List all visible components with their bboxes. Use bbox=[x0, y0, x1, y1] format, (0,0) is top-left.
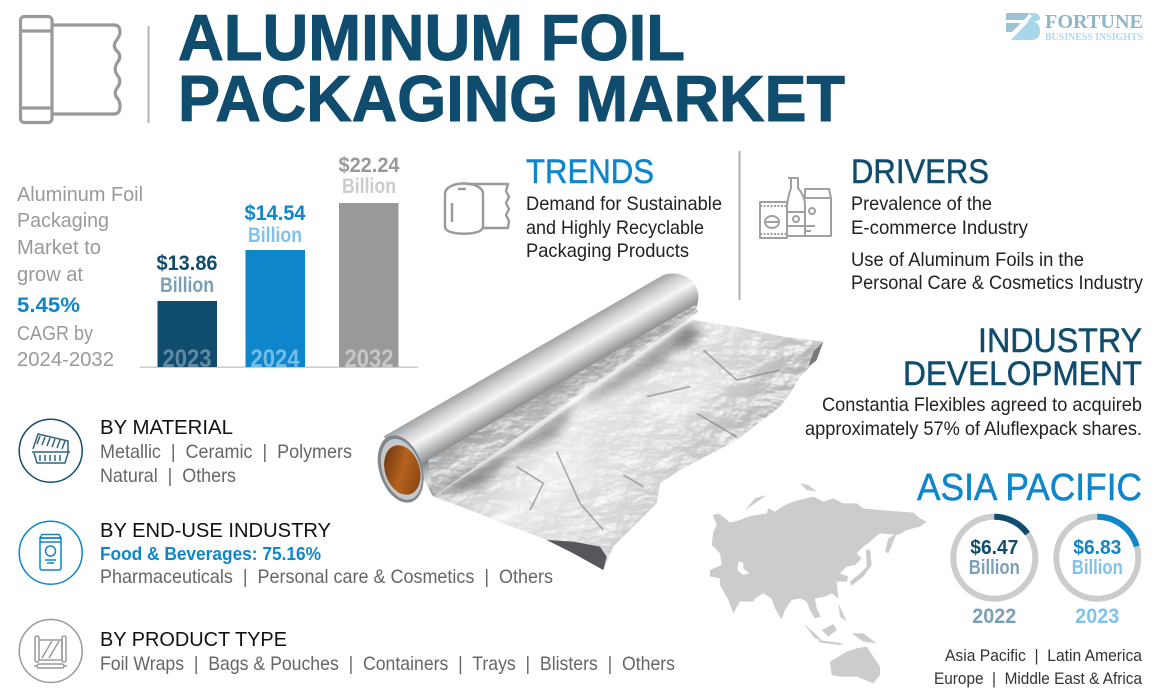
panel: by product type: Foil Wraps | Bags & Pouches | Containers | Trays | Blisters | Others bbox=[100, 653, 675, 675]
foil sheet bbox=[433, 320, 823, 570]
donut: 2022: 2022 bbox=[972, 605, 1016, 628]
panel: by material: Natural | Others bbox=[100, 465, 236, 487]
logo: Fortune Business Insights: BUSINESS INSIGHTS bbox=[1045, 32, 1143, 43]
donut: 2022: $6.47 bbox=[970, 536, 1018, 559]
panel: trends: Demand for Sustainable bbox=[526, 193, 722, 215]
bar chart: market size bbox=[140, 154, 418, 373]
panel: industry development: approximately 57% of Aluflexpack shares. bbox=[805, 418, 1142, 440]
donut: 2023: $6.83 bbox=[1073, 536, 1121, 559]
text block: market growth: 5.45% bbox=[17, 294, 80, 317]
panel: drivers: Personal Care & Cosmetics Industry bbox=[851, 272, 1143, 294]
bar: 2032: 2032 bbox=[344, 345, 394, 373]
panel: by material bbox=[19, 417, 352, 487]
panel: drivers: Use of Aluminum Foils in the bbox=[851, 249, 1084, 271]
bar: 2032 bbox=[338, 154, 400, 373]
icon: food packet bbox=[19, 521, 82, 584]
bar: 2024: 2024 bbox=[250, 345, 300, 373]
text block: regions: Asia Pacific | Latin America bbox=[945, 646, 1142, 665]
panel: industry development: INDUSTRY bbox=[978, 322, 1142, 360]
panel: trends: Packaging Products bbox=[526, 240, 689, 262]
text block: regions: Europe | Middle East & Africa bbox=[934, 669, 1142, 688]
donut: 2022 bbox=[953, 517, 1035, 628]
title: PACKAGING MARKET bbox=[178, 62, 845, 135]
panel: by end-use industry: BY END-USE INDUSTRY bbox=[100, 520, 331, 542]
panel: by material: Metallic | Ceramic | Polymers bbox=[100, 441, 352, 463]
donut: 2023: Billion bbox=[1072, 556, 1123, 579]
text block: market growth: Market to bbox=[17, 237, 101, 259]
foil creases bbox=[517, 350, 780, 530]
panel: trends: and Highly Recyclable bbox=[526, 217, 704, 239]
title: ALUMINUM FOIL bbox=[178, 1, 685, 74]
icon: food container bbox=[19, 419, 82, 482]
bar: 2032: $22.24 bbox=[338, 154, 400, 177]
logo: Fortune Business Insights: FORTUNE bbox=[1045, 11, 1143, 33]
panel: drivers bbox=[851, 153, 1143, 294]
title bbox=[178, 1, 845, 135]
bar: 2023: 2023 bbox=[162, 345, 212, 373]
panel: by end-use industry: Pharmaceuticals | Personal care & Cosmetics | Others bbox=[100, 566, 553, 588]
roll end bbox=[370, 429, 432, 509]
bar: 2032: Billion bbox=[342, 175, 396, 198]
text block: regions bbox=[934, 646, 1142, 688]
bar: 2023 bbox=[156, 252, 218, 373]
panel: by product type: BY PRODUCT TYPE bbox=[100, 629, 287, 651]
divider: trends and drivers bbox=[738, 151, 740, 300]
text block: market growth: 2024-2032 bbox=[17, 349, 114, 371]
bar: 2023: $13.86 bbox=[156, 252, 218, 275]
panel: trends: TRENDS bbox=[526, 153, 654, 191]
text block: market growth: Packaging bbox=[17, 210, 109, 232]
panel: trends bbox=[526, 153, 722, 262]
bar: 2024 bbox=[244, 202, 306, 373]
logo: Fortune Business Insights bbox=[1006, 11, 1143, 43]
panel: by product type bbox=[19, 620, 675, 682]
icon: paper roll bbox=[445, 184, 509, 234]
divider: header bbox=[148, 26, 150, 123]
panel: by end-use industry bbox=[19, 520, 553, 588]
panel: drivers: Prevalence of the bbox=[851, 193, 992, 215]
bar: 2024: Billion bbox=[248, 224, 302, 247]
text block: market growth: grow at bbox=[17, 264, 83, 286]
text block: market growth: CAGR by bbox=[17, 323, 93, 345]
icon: packaged products bbox=[760, 178, 831, 238]
bar: 2024: $14.54 bbox=[244, 202, 306, 225]
foil cylinder bbox=[383, 273, 698, 497]
text block: market growth: Aluminum Foil bbox=[17, 184, 143, 206]
bar: 2023: Billion bbox=[160, 274, 214, 297]
icon: foil roll bbox=[20, 16, 120, 122]
panel: industry development: Constantia Flexibles agreed to acquireb bbox=[822, 394, 1142, 416]
panel: by end-use industry: Food & Beverages: 75.16% bbox=[100, 543, 321, 564]
map: Asia Pacific bbox=[710, 483, 927, 683]
panel: industry development bbox=[805, 322, 1142, 440]
donut: 2023: 2023 bbox=[1075, 605, 1119, 628]
icon: foil wrap bbox=[19, 620, 82, 682]
panel: drivers: DRIVERS bbox=[851, 153, 989, 191]
image: aluminum foil roll bbox=[370, 273, 823, 570]
donut: 2023 bbox=[1056, 517, 1138, 628]
heading: Asia Pacific: ASIA PACIFIC bbox=[917, 467, 1142, 509]
text block: market growth bbox=[17, 184, 143, 371]
panel: by material: BY MATERIAL bbox=[100, 417, 233, 439]
panel: industry development: DEVELOPMENT bbox=[903, 355, 1142, 393]
donut: 2022: Billion bbox=[969, 556, 1020, 579]
panel: drivers: E-commerce Industry bbox=[851, 217, 1028, 239]
